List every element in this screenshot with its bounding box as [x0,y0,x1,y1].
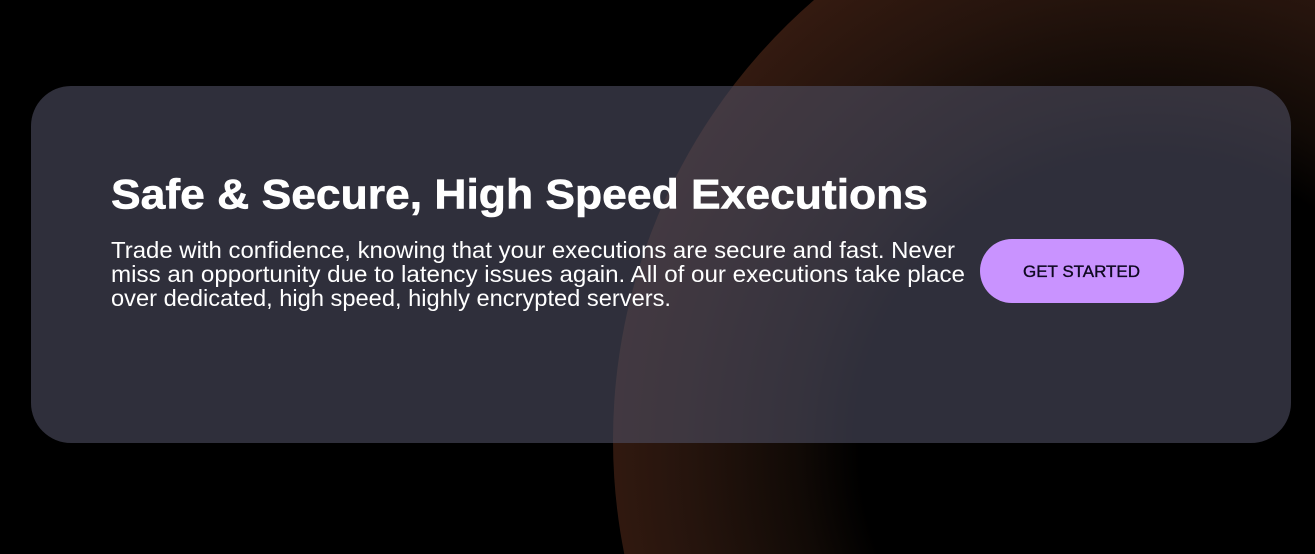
button: get started [980,239,1184,303]
body text: over dedicated, high speed, highly encrypted servers. [111,285,671,311]
background glow circle [613,0,1315,554]
panel: translucent card [31,86,1291,443]
body text: Trade with confidence, knowing that your executions are secure and fast. Never [111,237,955,263]
button label: GET STARTED [1023,263,1140,281]
body text: miss an opportunity due to latency issues again. All of our executions take place [111,261,965,287]
body text [111,237,965,311]
heading: Safe & Secure, High Speed Executions [111,170,928,218]
